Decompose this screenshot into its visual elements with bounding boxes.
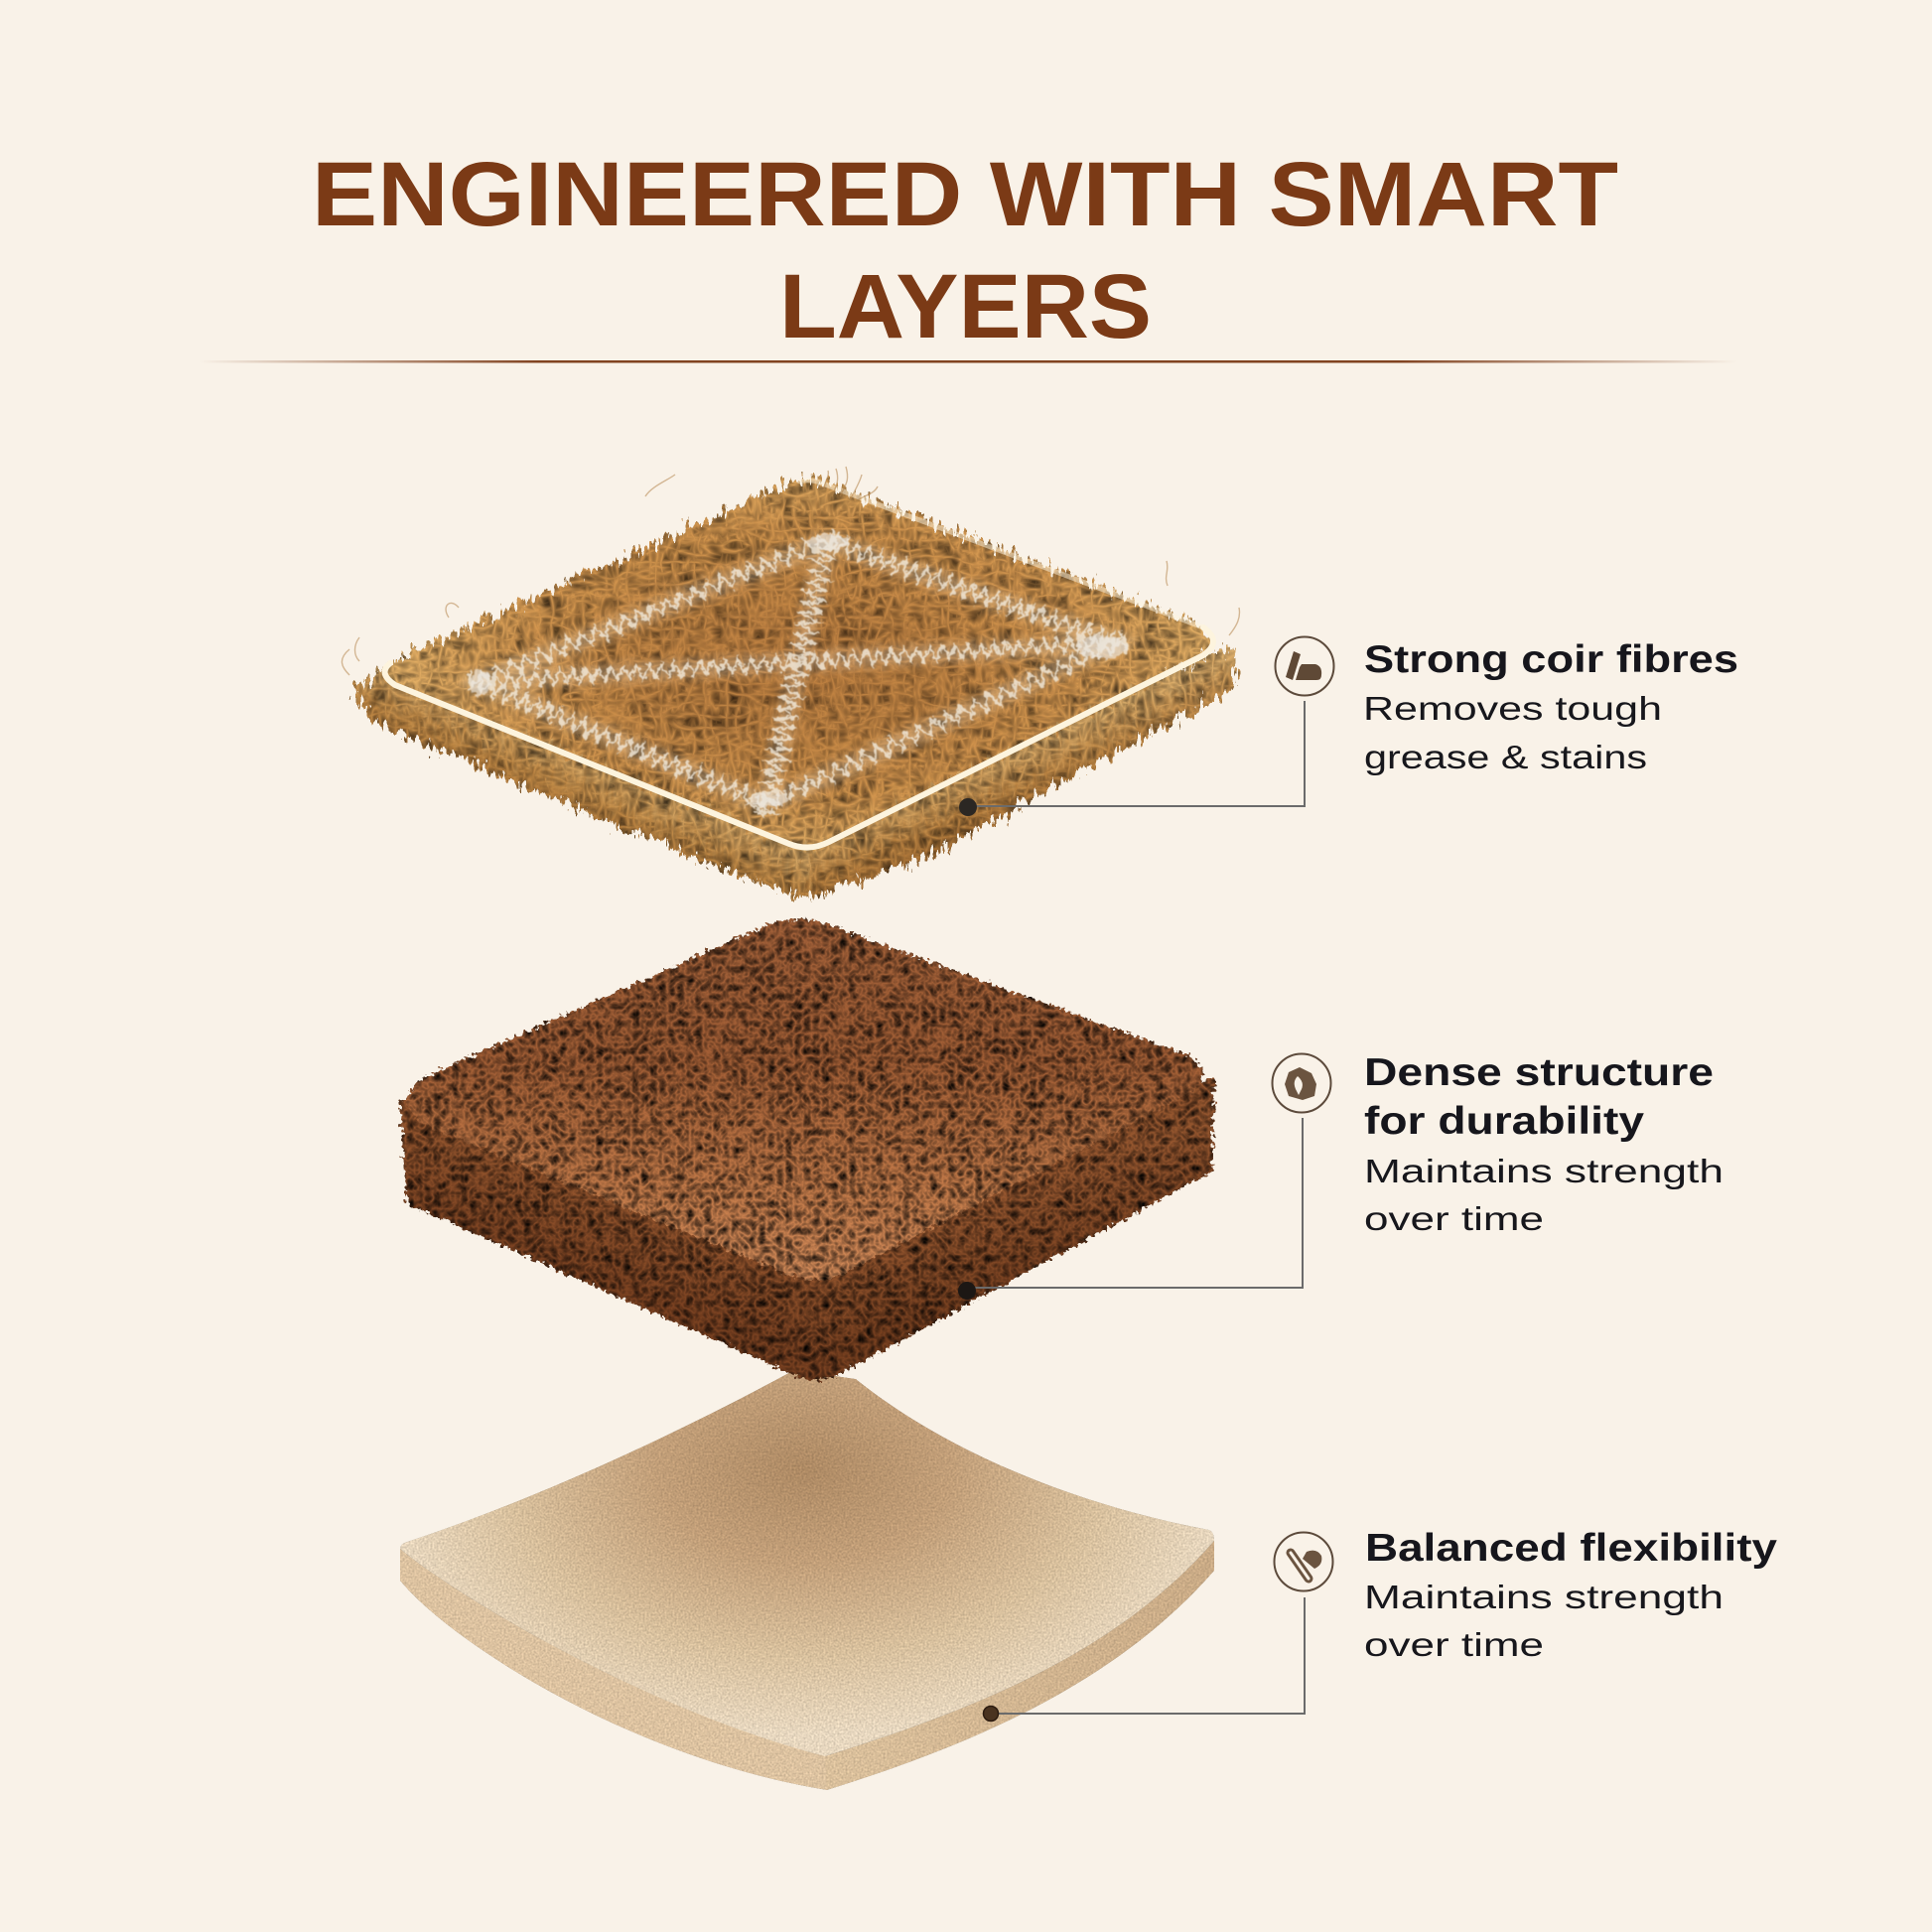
white stitched pattern [464,527,1131,818]
title: LAYERS [779,256,1152,357]
icon: dense block [1273,1054,1330,1112]
text: dense structure: Dense structure [1364,1051,1714,1094]
layer 1: coir scrub pad [342,467,1240,897]
icon: coir roll [1275,637,1334,695]
dot 1 [959,798,977,816]
text: strong coir fibres: grease & stains [1364,740,1647,776]
layer 2: dense coir foam block [400,919,1214,1380]
leader line 2 [966,1118,1303,1288]
leader line 1 [968,701,1305,806]
layer 3: flexible backing mat [400,1370,1214,1790]
title: ENGINEERED WITH SMART [312,144,1618,245]
text: strong coir fibres [1363,638,1738,776]
text: dense structure: over time [1364,1201,1544,1238]
text: strong coir fibres: Removes tough [1363,691,1662,728]
icon: flexible sheet [1275,1533,1332,1590]
text: balanced flexibility: Balanced flexibility [1365,1527,1777,1570]
text: dense structure [1364,1051,1724,1238]
text: balanced flexibility: Maintains strength [1364,1580,1724,1616]
text: dense structure: for durability [1364,1100,1644,1143]
title [312,144,1618,357]
stray fibres [342,467,1240,675]
callout 2: dense structure [958,1051,1724,1300]
text: dense structure: Maintains strength [1364,1154,1724,1190]
leader line 3 [991,1597,1305,1714]
text: balanced flexibility [1364,1527,1777,1664]
pale rim of the pad [385,481,1213,848]
darker centre of fibres [586,581,1003,769]
text: strong coir fibres: Strong coir fibres [1364,638,1738,681]
stitch corner patches [471,534,1126,807]
dot 3 [983,1706,999,1722]
dot 2 [958,1282,976,1300]
callout 3: balanced flexibility [983,1527,1777,1722]
callout 1: strong coir fibres [959,637,1738,816]
pad fibres body and top face [349,480,1236,897]
text: balanced flexibility: over time [1364,1627,1544,1664]
